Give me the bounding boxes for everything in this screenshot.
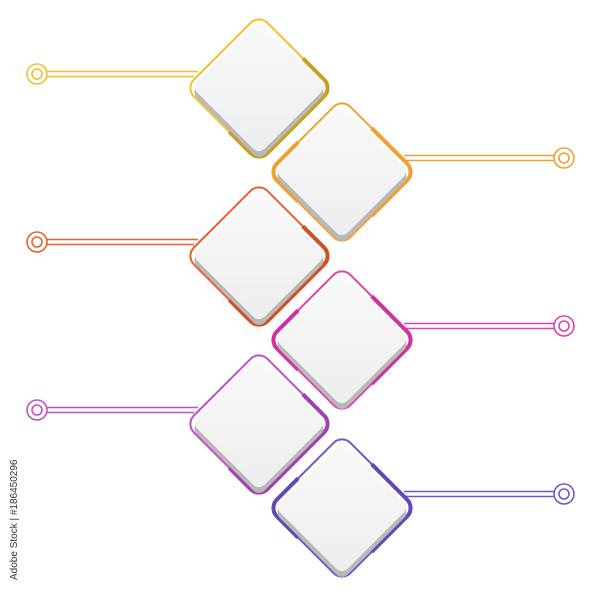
diamond: step 2 xyxy=(268,98,416,246)
diamond: step 3 xyxy=(185,182,333,330)
diamond: step 5 xyxy=(185,350,333,498)
connector: step 1 xyxy=(27,64,198,84)
connector: step 3 xyxy=(27,232,198,252)
diamond: step 1 xyxy=(185,14,333,162)
watermark id: Adobe Stock | #186450296 xyxy=(9,459,20,580)
connector: step 2 xyxy=(400,148,574,168)
connector: step 5 xyxy=(27,400,198,420)
connector: step 4 xyxy=(400,316,574,336)
connector: step 6 xyxy=(400,484,574,504)
diamond: step 6 xyxy=(268,434,416,582)
diamond: step 4 xyxy=(268,266,416,414)
